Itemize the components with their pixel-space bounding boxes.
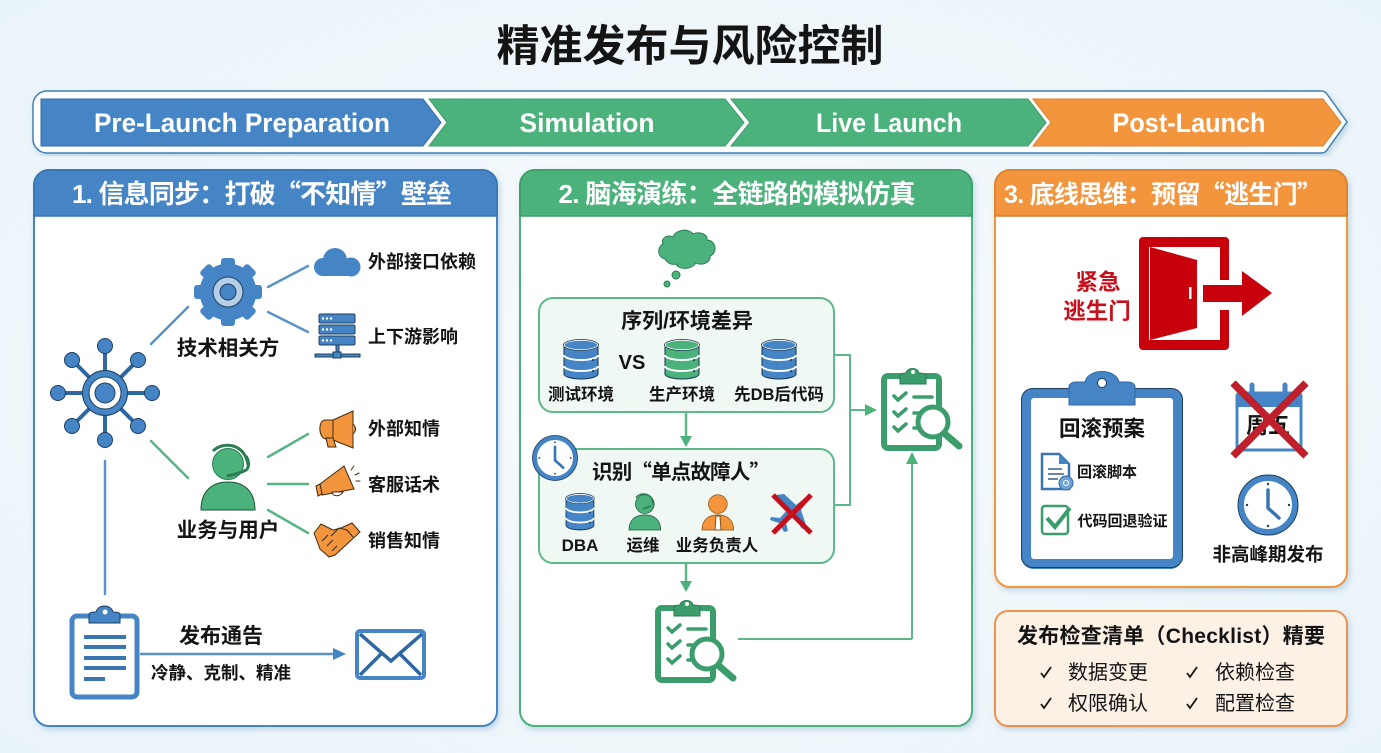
icon: test db	[564, 340, 598, 379]
icon: crossed-out friday calendar: 周五	[1246, 413, 1290, 438]
label: code rollback verify: 代码回退验证	[1077, 512, 1168, 530]
label: external awareness: 外部知情	[368, 418, 440, 439]
stage: Simulation: Simulation	[520, 108, 654, 138]
icon: production db	[664, 340, 700, 379]
icon: cloud	[314, 248, 360, 276]
label: sales awareness: 销售知情	[368, 531, 440, 551]
stage bar	[33, 91, 1347, 153]
label: business owner: 业务负责人	[676, 536, 759, 555]
checklist items left: 权限确认	[1068, 692, 1148, 715]
icon: support person	[201, 445, 255, 510]
icon: rollback clipboard	[1022, 372, 1182, 568]
connector lines	[105, 266, 308, 594]
checklist items left	[1041, 661, 1148, 715]
icon: megaphone	[320, 411, 356, 448]
label: tone: 冷静、克制、精准	[151, 663, 291, 683]
label: emergency exit: 紧急	[1075, 270, 1121, 295]
icon: db first	[762, 340, 796, 379]
box 2 title: 识别“单点故障人”	[592, 455, 770, 485]
panel 1 header	[34, 170, 497, 216]
box: single points of failure	[539, 449, 834, 563]
checklist items right: 依赖检查	[1215, 661, 1295, 684]
label: external api: 外部接口依赖	[368, 251, 476, 272]
panel 1: information sync	[34, 170, 497, 726]
icon: server	[315, 314, 360, 358]
panel 3 header: 3. 底线思维：预留“逃生门”	[1004, 175, 1322, 211]
icon: network hub	[50, 338, 160, 448]
label: emergency exit	[1063, 270, 1131, 324]
icon: script document	[1042, 454, 1073, 490]
panel 1 header: 1. 信息同步：打破“不知情”壁垒	[72, 174, 452, 211]
label: off-peak release: 非高峰期发布	[1212, 544, 1324, 565]
arrow: box 2 to audit clipboard	[680, 563, 692, 592]
icon: loudspeaker	[316, 466, 360, 496]
label: production env: 生产环境	[649, 384, 715, 404]
stage: Post-Launch	[1033, 99, 1341, 146]
stage: Live Launch: Live Launch	[816, 108, 962, 138]
icon: grounded plane crossed out	[770, 494, 812, 533]
label: rollback plan: 回滚预案	[1059, 417, 1145, 441]
stage: Pre-Launch Preparation	[41, 99, 441, 146]
arrow: notice to email	[140, 648, 346, 660]
label: ops: 运维	[626, 536, 660, 555]
panel 2: mental rehearsal	[520, 170, 972, 726]
stage: Pre-Launch Preparation: Pre-Launch Preparation	[94, 108, 390, 138]
checklist title: 发布检查清单（Checklist）精要	[1017, 624, 1325, 648]
label: dba: DBA	[562, 536, 598, 555]
icon: envelope	[357, 631, 424, 678]
icon: handshake	[314, 523, 360, 557]
panel 2 header: 2. 脑海演练：全链路的模拟仿真	[558, 179, 916, 209]
icon: audit clipboard right	[884, 368, 959, 448]
label: tech stakeholders: 技术相关方	[177, 336, 279, 360]
label: customer service script: 客服话术	[368, 474, 440, 495]
checklist items left: 数据变更	[1068, 661, 1148, 684]
icon: dba db	[566, 494, 594, 530]
icon: exit door	[1139, 237, 1272, 350]
checklist items right	[1187, 661, 1295, 715]
box: environment differences	[539, 298, 834, 412]
label: db then code: 先DB后代码	[734, 385, 824, 404]
label: rollback script: 回滚脚本	[1077, 463, 1137, 481]
panel 4: checklist summary	[995, 611, 1347, 726]
panel 3: bottom-line thinking	[995, 170, 1347, 587]
arrow: into audit clipboard	[738, 452, 918, 639]
panel 2 header	[520, 170, 972, 216]
icon: notice clipboard	[72, 606, 137, 697]
box 1 title: 序列/环境差异	[621, 310, 753, 333]
icon: off-peak clock	[1238, 475, 1298, 535]
checklist items right: 配置检查	[1215, 692, 1295, 715]
label: emergency exit: 逃生门	[1063, 299, 1131, 324]
vs label: VS	[619, 352, 645, 374]
icon: clock	[532, 436, 578, 480]
icon: thought cloud	[659, 230, 715, 287]
icon: crossed-out friday calendar	[1233, 383, 1306, 456]
label: test env: 测试环境	[548, 384, 614, 404]
title: 精准发布与风险控制	[496, 23, 884, 71]
icon: audit clipboard bottom	[658, 600, 733, 680]
icon: verification check	[1042, 506, 1070, 534]
label: upstream downstream: 上下游影响	[368, 326, 458, 347]
connector: boxes to checklist	[834, 355, 877, 505]
stage: Simulation	[429, 99, 744, 146]
stage: Post-Launch: Post-Launch	[1112, 108, 1266, 138]
arrow: box 1 to box 2	[680, 412, 692, 447]
label: business and users: 业务与用户	[177, 518, 279, 542]
label: release notice: 发布通告	[179, 625, 263, 648]
icon: ops person	[629, 494, 661, 530]
icon: gear	[194, 258, 262, 326]
stage: Live Launch	[731, 99, 1046, 146]
icon: business owner	[702, 495, 734, 530]
